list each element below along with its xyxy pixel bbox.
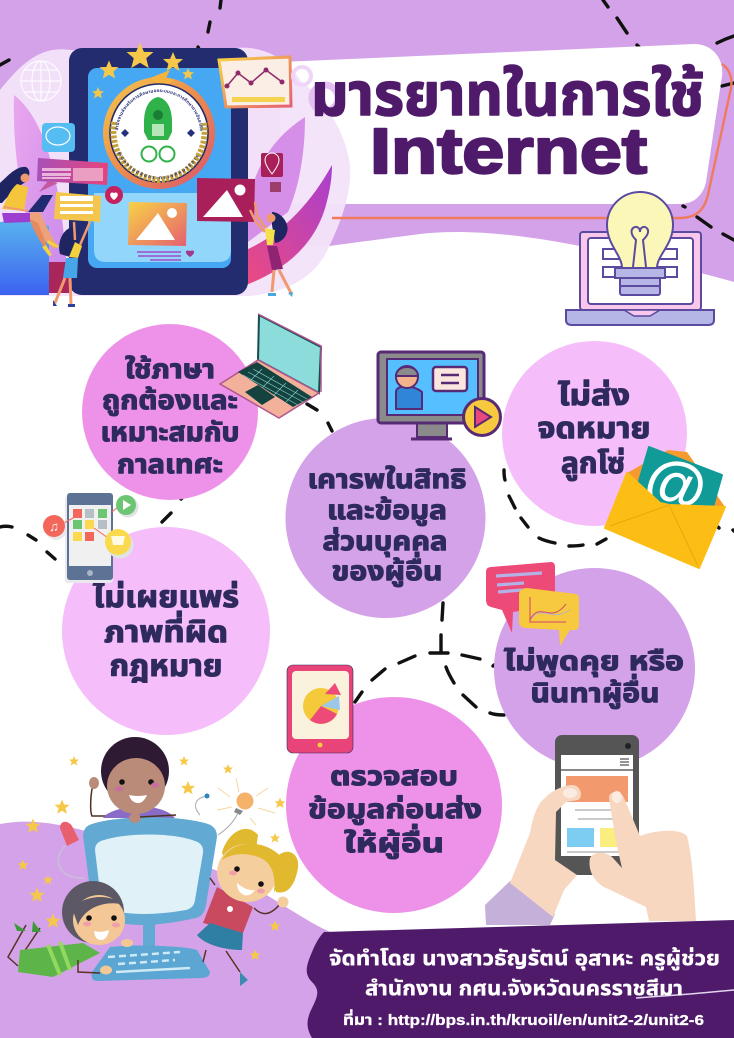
panel: use proper language: ถูกต้องและ — [102, 385, 238, 416]
image card gold — [128, 202, 187, 246]
background: top purple wave — [0, 0, 734, 282]
woman holding yellow card — [53, 222, 90, 307]
background: bottom purple wave — [0, 822, 330, 1038]
image card magenta — [197, 178, 255, 222]
panel: respect privacy: ของผู้อื่น — [332, 552, 442, 587]
credit: office: สำนักงาน กศน.จังหวัดนครราชสีมา — [365, 978, 683, 1000]
logo seal: สำนักงานปลัดกระทรวงศึกษาธิการ — [118, 152, 198, 179]
panel: check before sending — [286, 697, 502, 913]
leaves — [14, 95, 68, 290]
mouse — [58, 822, 85, 878]
panel: no gossip — [494, 568, 695, 769]
panel: use proper language: เหมาะสมกับ — [100, 417, 240, 447]
computer — [83, 813, 217, 981]
boy with dark hair — [89, 737, 175, 818]
panel: no illegal images: กฎหมาย — [110, 650, 222, 683]
panel: use proper language: กาลเทศะ — [117, 449, 223, 479]
title text: Internet — [370, 115, 647, 187]
text lines under image — [137, 252, 181, 260]
panel: no chain mail — [502, 341, 687, 526]
icon: monitor with person — [378, 352, 500, 439]
credit: author: จัดทำโดย นางสาวธัญรัตน์ อุสาหะ ครูผู้ช่วย — [329, 948, 720, 970]
footer credit banner — [307, 920, 734, 1038]
panel: no illegal images: ภาพที่ผิด — [104, 610, 228, 649]
tablet body — [69, 48, 248, 295]
icon: envelope — [605, 444, 725, 568]
logo seal — [103, 70, 215, 189]
speech bubble card — [42, 123, 75, 152]
stars — [92, 42, 194, 98]
credit: source: ที่มา : http://bps.in.th/kruoil/en/unit2-2/unit2-6 — [343, 1009, 704, 1029]
title panel background — [280, 44, 722, 204]
decorative white swoosh — [636, 990, 734, 998]
bulb with rays — [196, 778, 275, 835]
woman seated with laptop — [0, 167, 59, 256]
panel: no chain mail: ไม่ส่ง — [558, 380, 630, 412]
panel: no chain mail: จดหมาย — [538, 413, 650, 445]
pink browser card — [37, 158, 108, 192]
panel: respect privacy: ส่วนบุคคล — [322, 526, 448, 557]
panel: no illegal images: ไม่เผยแพร่ — [93, 581, 239, 614]
title text: มารยาทในการใช้ — [311, 61, 704, 128]
panel: no illegal images — [62, 527, 270, 735]
yellow card — [54, 192, 101, 222]
icon: phone with apps — [43, 493, 138, 583]
panel: no chain mail: ลูกโซ่ — [561, 448, 625, 481]
panel: use proper language — [82, 324, 258, 500]
orange title outline — [332, 64, 731, 218]
blue stool — [0, 221, 49, 295]
globe — [21, 61, 61, 101]
logo seal: สำนักงานส่งเสริมการศึกษานอกระบบและการศึกษาตามอัธยาศัย — [114, 90, 204, 131]
woman holding magenta card — [250, 202, 293, 297]
girl — [197, 829, 298, 986]
small heart — [186, 250, 194, 257]
kids with computer illustration — [8, 737, 298, 986]
gears — [293, 67, 338, 111]
pin card — [261, 153, 283, 192]
pale blob — [0, 48, 350, 296]
panel: check before sending: ให้ผู้อื่น — [344, 824, 444, 859]
panel: respect privacy: และข้อมูล — [327, 495, 447, 526]
small stars — [18, 756, 286, 960]
icon: hands holding phone — [485, 735, 696, 925]
panel: use proper language: ใช้ภาษา — [125, 354, 215, 384]
icon: laptop — [220, 314, 321, 418]
panel: check before sending: ข้อมูลก่อนส่ง — [308, 794, 482, 825]
panel: no gossip: ไม่พูดคุย หรือ — [504, 646, 684, 677]
heart bubble — [105, 186, 123, 204]
title text — [311, 61, 704, 187]
chart card — [219, 57, 291, 107]
icon: tablet with pie chart — [287, 665, 353, 753]
panel: respect privacy — [286, 418, 486, 618]
boy lying down — [8, 881, 133, 977]
icon: envelope: @ — [638, 444, 714, 525]
dashed connector lines — [0, 0, 734, 715]
panel: respect privacy: เคารพในสิทธิ — [308, 464, 466, 494]
hero illustration: tablet with team — [0, 42, 350, 307]
panel: check before sending: ตรวจสอบ — [330, 761, 458, 791]
icon: bulb on laptop — [566, 192, 714, 325]
icon: chat bubbles with chart — [486, 562, 579, 646]
icon: phone with apps: ♫ — [49, 519, 59, 534]
panel: no gossip: นินทาผู้อื่น — [530, 674, 660, 709]
